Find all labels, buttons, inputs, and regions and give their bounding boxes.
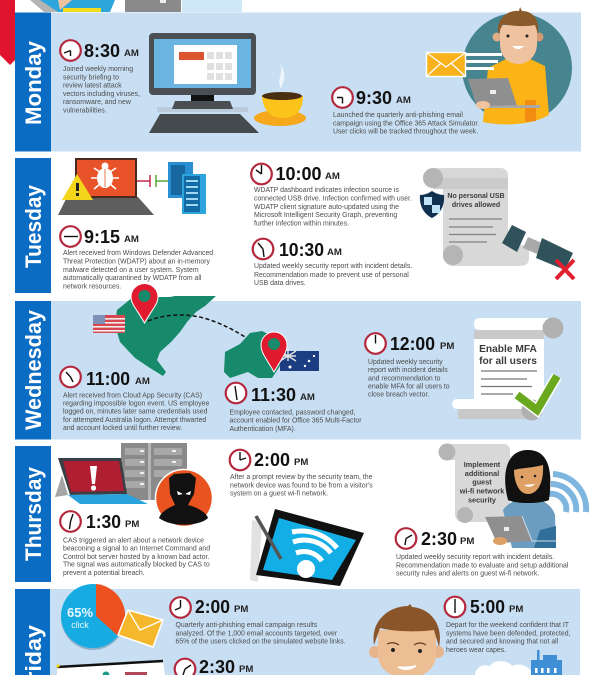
icon: tablet with wifi: [250, 509, 364, 586]
time 5:00 PM: [470, 597, 523, 617]
time 1:30 PM: PM: [125, 519, 139, 530]
text block: 9:15: network resources.: [63, 284, 121, 290]
text block: 2:30 Thursday: security rules and alerts on guest wi-fi network.: [396, 571, 539, 578]
text block: 10:00: Microsoft Intelligent Security Graph, preventing: [254, 212, 397, 219]
text block: 11:00: and account locked until further review.: [63, 425, 182, 432]
time 5:00 PM: 5:00: [470, 597, 505, 617]
scroll text: [447, 193, 505, 209]
text block: 9:15: automatically quarantined by WDATP from all: [63, 275, 202, 282]
scroll text: [479, 344, 538, 367]
text block: 2:30 Thursday: [396, 554, 569, 578]
time 12:00 PM: PM: [440, 341, 454, 352]
icon: desktop computer: [149, 33, 259, 133]
time 2:00 PM: 2:00: [254, 450, 290, 470]
time 8:30 AM: 8:30: [84, 41, 120, 61]
text block: 2:00 Thursday: network device was found to be from a visitor's: [230, 482, 373, 490]
text block: 2:00 Friday: analyzed. Of the 1,000 email accounts targeted, over: [176, 630, 338, 637]
clock 2:30 Thursday: [396, 528, 416, 549]
text block: 2:00 Friday: 65% of the users clicked on the simulated website links.: [176, 639, 346, 646]
text block: 2:00 Friday: [176, 622, 346, 646]
icon: tablet alert: [55, 458, 148, 504]
text block: 2:00 Thursday: system on a guest wi-fi network.: [230, 491, 328, 498]
text block: 5:00: systems have been defended, protected,: [446, 630, 571, 637]
illustration: man with laptop and envelope: [426, 7, 572, 124]
text block: 1:30: The signal was automatically blocked by CAS to: [63, 562, 210, 569]
heading: Tuesday: Tuesday: [21, 184, 46, 268]
time 11:30 AM: 11:30: [251, 385, 296, 405]
time 10:00 AM: 10:00: [276, 164, 322, 184]
scroll text: Enable MFA: [479, 344, 538, 355]
scroll text: additional: [465, 469, 499, 478]
pie chart: 65% click: [61, 584, 125, 650]
text block: 10:00: further infection within minutes.: [254, 220, 349, 228]
text block: 9:15: [63, 250, 213, 290]
text block: 8:30: vulnerabilities.: [63, 108, 107, 114]
time 2:30 PM: PM: [460, 536, 474, 547]
text block: 10:00: [254, 187, 412, 228]
text block: 10:00: WDATP client signature auto-updated using the: [254, 204, 399, 211]
time 9:30 AM: AM: [396, 95, 411, 106]
clock 11:00: [60, 367, 81, 387]
scroll text: No personal USB: [447, 193, 505, 200]
clock 1:30: [60, 511, 81, 532]
icon: blocked connection: [137, 175, 168, 187]
text block: 12:00: Updated weekly security: [368, 359, 443, 366]
text block: 12:00: close breach vector.: [368, 392, 429, 398]
illustration: woman with scroll and wifi: [438, 444, 586, 548]
text block: 11:00: Alert received from Cloud App Security (CAS): [63, 392, 202, 400]
illustration: USB policy scroll: [420, 168, 574, 279]
clock 12:00: [365, 333, 386, 354]
clock 11:30: [226, 383, 246, 403]
text block: 11:00: logged on, minutes later same credentials used: [63, 408, 208, 416]
time 2:00 PM: [254, 450, 308, 470]
text block: 9:30: campaign using the Office 365 Attack Simulator.: [333, 120, 479, 128]
time 2:30 PM: [421, 529, 474, 549]
text block: 11:30: Employee contacted, password changed,: [230, 410, 356, 416]
time 10:30 AM: AM: [327, 247, 342, 258]
time 9:15 AM: 9:15: [84, 227, 120, 247]
clock 10:30: [253, 239, 273, 259]
text block: 11:30: Authentication (MFA).: [230, 426, 296, 433]
scroll text: wi-fi network: [459, 486, 505, 496]
text block: 10:30: Recommendation made to prevent use of personal: [254, 272, 409, 279]
time 11:30 AM: AM: [300, 392, 315, 403]
text block: 9:15: malware detected on a user system. System: [63, 267, 199, 274]
panel: Wednesday: [15, 301, 581, 440]
time 8:30 AM: [84, 41, 139, 61]
text block: 2:00 Friday: Quarterly anti-phishing email campaign results: [176, 622, 318, 629]
heading: Monday: Monday: [21, 40, 46, 125]
text block: 12:00: [368, 359, 450, 398]
icon: server rack: [121, 443, 187, 500]
text block: 1:30: CAS triggered an alert about a network device: [63, 537, 204, 544]
time 5:00 PM: PM: [509, 604, 523, 615]
text block: 5:00: [446, 622, 571, 654]
time 2:00 PM: PM: [294, 457, 308, 468]
time 10:30 AM: 10:30: [279, 240, 324, 260]
time 9:15 AM: AM: [124, 234, 139, 245]
time 9:30 AM: [356, 88, 411, 108]
text block: 2:00 Thursday: After a prompt review by the security team, the: [230, 474, 373, 481]
text block: 5:00: and secured and knowing that not all: [446, 639, 559, 646]
icon: hacker: [156, 470, 212, 526]
clock 10:00: [251, 164, 272, 184]
text block: 8:30: vectors including viruses,: [63, 91, 140, 98]
panel: Tuesday: [15, 158, 51, 293]
time 9:30 AM: 9:30: [356, 88, 392, 108]
text block: 5:00: Depart for the weekend confident that IT: [446, 622, 570, 629]
arrow: dashed route: [148, 315, 260, 348]
heading: Wednesday: Wednesday: [21, 309, 46, 430]
text block: 9:30: User clicks will be tracked throughout the week.: [333, 128, 478, 136]
icon: infected laptop: [58, 158, 154, 215]
text block: 11:00: for attempted Australia logon. Attempt thwarted: [63, 417, 206, 424]
text block: 9:30: [333, 112, 479, 136]
time 2:30 PM Friday: PM: [239, 664, 253, 675]
time 2:30 PM: 2:30: [421, 529, 457, 549]
text block: 10:00: connected USB drive. Infection confirmed with user.: [254, 196, 412, 202]
clock 9:15: [60, 226, 81, 247]
text block: 1:30: [63, 537, 210, 577]
text block: 12:00: report with incident details: [368, 367, 448, 374]
map: North America with pin and flag: [93, 284, 216, 376]
header illustration strip: [0, 0, 242, 65]
text block: 10:00: WDATP dashboard indicates infection source is: [254, 187, 399, 194]
time 10:00 AM: AM: [325, 171, 340, 182]
text block: 9:15: Alert received from Windows Defender Advanced: [63, 250, 213, 257]
text block: 1:30: beaconing a signal to an Internet Command and: [63, 546, 210, 553]
text block: 10:30: [254, 263, 412, 287]
icon: servers: [168, 162, 206, 214]
text block: 11:30: [230, 410, 362, 433]
clock 5:00: [445, 597, 465, 617]
scroll text: guest: [472, 478, 492, 486]
text block: 2:30 Thursday: Recommendation made to evaluate and setup additional: [396, 562, 569, 569]
panel: Thursday: [15, 446, 51, 582]
text block: 2:00 Thursday: [230, 474, 373, 498]
text block: 10:30: USB data drives.: [254, 280, 306, 287]
time 8:30 AM: AM: [124, 48, 139, 59]
clock 9:30: [332, 87, 353, 108]
scroll text: for all users: [479, 356, 537, 367]
text block: 5:00: heroes wear capes.: [446, 647, 506, 654]
text block: 8:30: [63, 66, 140, 114]
text block: 11:00: regarding impossible logon event. US employee: [63, 400, 209, 408]
text block: 12:00: enable MFA for all users to: [368, 384, 450, 390]
time 1:30 PM: 1:30: [86, 512, 121, 532]
text block: 8:30: review latest attack: [63, 82, 122, 90]
panel: Friday: [15, 589, 580, 675]
scroll text: drives allowed: [452, 202, 500, 209]
icon: tilted envelope: [118, 610, 163, 647]
time 11:00 AM: AM: [135, 376, 150, 387]
text block: 9:15: Threat Protection (WDATP) about an in-memory: [63, 258, 210, 266]
text block: 11:00: [63, 392, 209, 432]
time 12:00 PM: 12:00: [390, 334, 435, 354]
text block: 2:30 Thursday: Updated weekly security report with incident details.: [396, 554, 554, 561]
pie chart: 65% click: 65%: [67, 605, 93, 620]
clock 2:00 Thursday: [230, 450, 250, 470]
text block: 1:30: Control bot server hosted by a known bad actor.: [63, 554, 209, 561]
icon: laptop report: [56, 660, 165, 675]
time 9:15 AM: [84, 227, 139, 247]
text block: 11:30: account enabled for Office 365 Multi-Factor: [230, 418, 362, 425]
scroll text: security: [468, 496, 497, 504]
clock 8:30: [60, 40, 81, 61]
clock 2:00 Friday: [170, 597, 191, 618]
illustration: MFA scroll: [452, 318, 564, 420]
text block: 12:00: and recommendation to: [368, 376, 441, 382]
panel: Monday: [15, 12, 581, 152]
time 11:00 AM: 11:00: [86, 369, 130, 389]
text block: 1:30: prevent a potential breach.: [63, 570, 145, 577]
clock 2:30 Friday: [175, 659, 195, 675]
time 1:30 PM: [86, 512, 139, 532]
icon: cloud and factory: [475, 650, 562, 675]
text block: 8:30: ransomware, and new: [63, 99, 131, 106]
scroll text: [459, 460, 505, 504]
text block: 9:30: Launched the quarterly anti-phishing email: [333, 112, 463, 119]
time 2:00 PM Friday: 2:00: [195, 597, 230, 617]
scroll text: Implement: [464, 460, 501, 469]
text block: 8:30: security briefing to: [63, 74, 119, 82]
map: Australia with pin and flag: [224, 331, 319, 378]
time 2:00 PM Friday: PM: [234, 604, 248, 615]
heading: Thursday: Thursday: [21, 466, 46, 561]
pie chart: 65% click: click: [71, 620, 89, 630]
text block: 10:30: Updated weekly security report with incident details.: [254, 263, 412, 270]
icon: coffee cup: [254, 64, 306, 126]
time 2:00 PM Friday: [195, 597, 248, 617]
time 2:30 PM Friday: [199, 657, 253, 675]
illustration: smiling man: [369, 604, 444, 675]
text block: 8:30: Joined weekly morning: [63, 66, 133, 73]
